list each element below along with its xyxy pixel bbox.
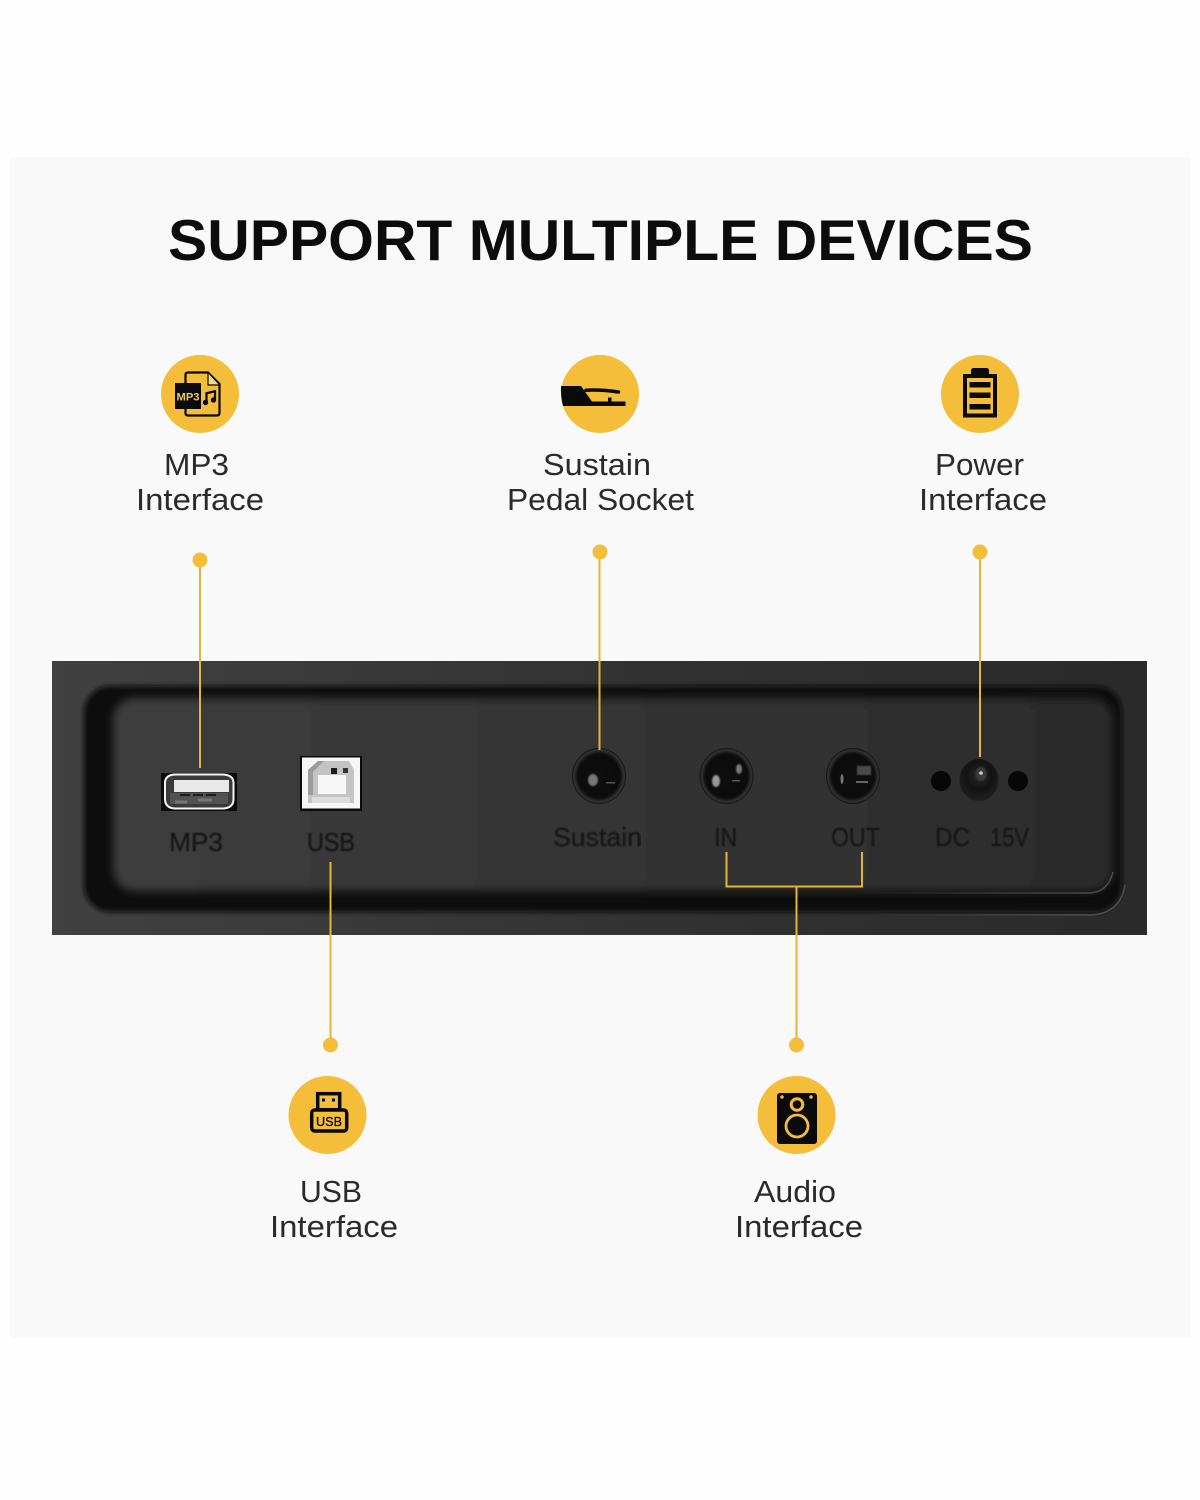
embossed port labels: IN [714,822,737,852]
label: Sustain Pedal Socket: Sustain [543,447,651,482]
callout: sustain pedal socket [507,355,694,517]
label: Sustain Pedal Socket [507,447,694,517]
callout: power interface [919,355,1047,517]
embossed port labels: Sustain [553,822,642,852]
icon: speaker [758,1076,836,1154]
label: MP3 Interface: Interface [136,482,264,517]
label: USB Interface: Interface [270,1209,398,1244]
label: MP3 Interface: MP3 [164,447,229,482]
label: Power Interface: Power [935,447,1024,482]
icon: MP3 file [161,355,239,433]
connector: power [972,544,988,757]
connector: USB [323,862,338,1052]
embossed port labels: 15V [990,822,1030,852]
label: USB Interface [270,1174,398,1244]
embossed port labels: OUT [831,822,880,852]
port: DC power jack [931,759,1028,801]
callout: USB interface [270,1076,398,1244]
label: Audio Interface: Interface [735,1209,863,1244]
label: MP3 Interface [136,447,264,517]
connector: audio bracket [726,852,862,1052]
port: audio in jack [700,748,754,804]
embossed port labels: USB [307,827,355,857]
label: USB Interface: USB [300,1174,362,1209]
connector: MP3 [192,552,208,768]
callout: audio interface [735,1076,863,1244]
title: SUPPORT MULTIPLE DEVICES [168,209,1033,273]
label: Power Interface [919,447,1047,517]
port: USB B [300,756,362,811]
connector: sustain [592,544,608,750]
embossed port labels: MP3 [169,827,223,857]
embossed port labels: DC [935,822,970,852]
port: USB A [161,773,237,811]
icon: USB drive [288,1076,366,1154]
icon: battery [941,355,1019,433]
icon: USB drive: USB [316,1114,342,1129]
label: Audio Interface [735,1174,863,1244]
icon: sustain pedal [561,355,639,433]
label: Power Interface: Interface [919,482,1047,517]
label: Audio Interface: Audio [754,1174,836,1209]
callout: MP3 interface [136,355,264,517]
label: Sustain Pedal Socket: Pedal Socket [507,482,694,517]
port: audio out jack [826,748,880,804]
embossed port labels [169,822,1030,857]
port: sustain jack [572,748,626,804]
background panel [10,157,1191,1338]
device back panel [52,661,1147,935]
icon: MP3 file: MP3 [176,392,200,404]
